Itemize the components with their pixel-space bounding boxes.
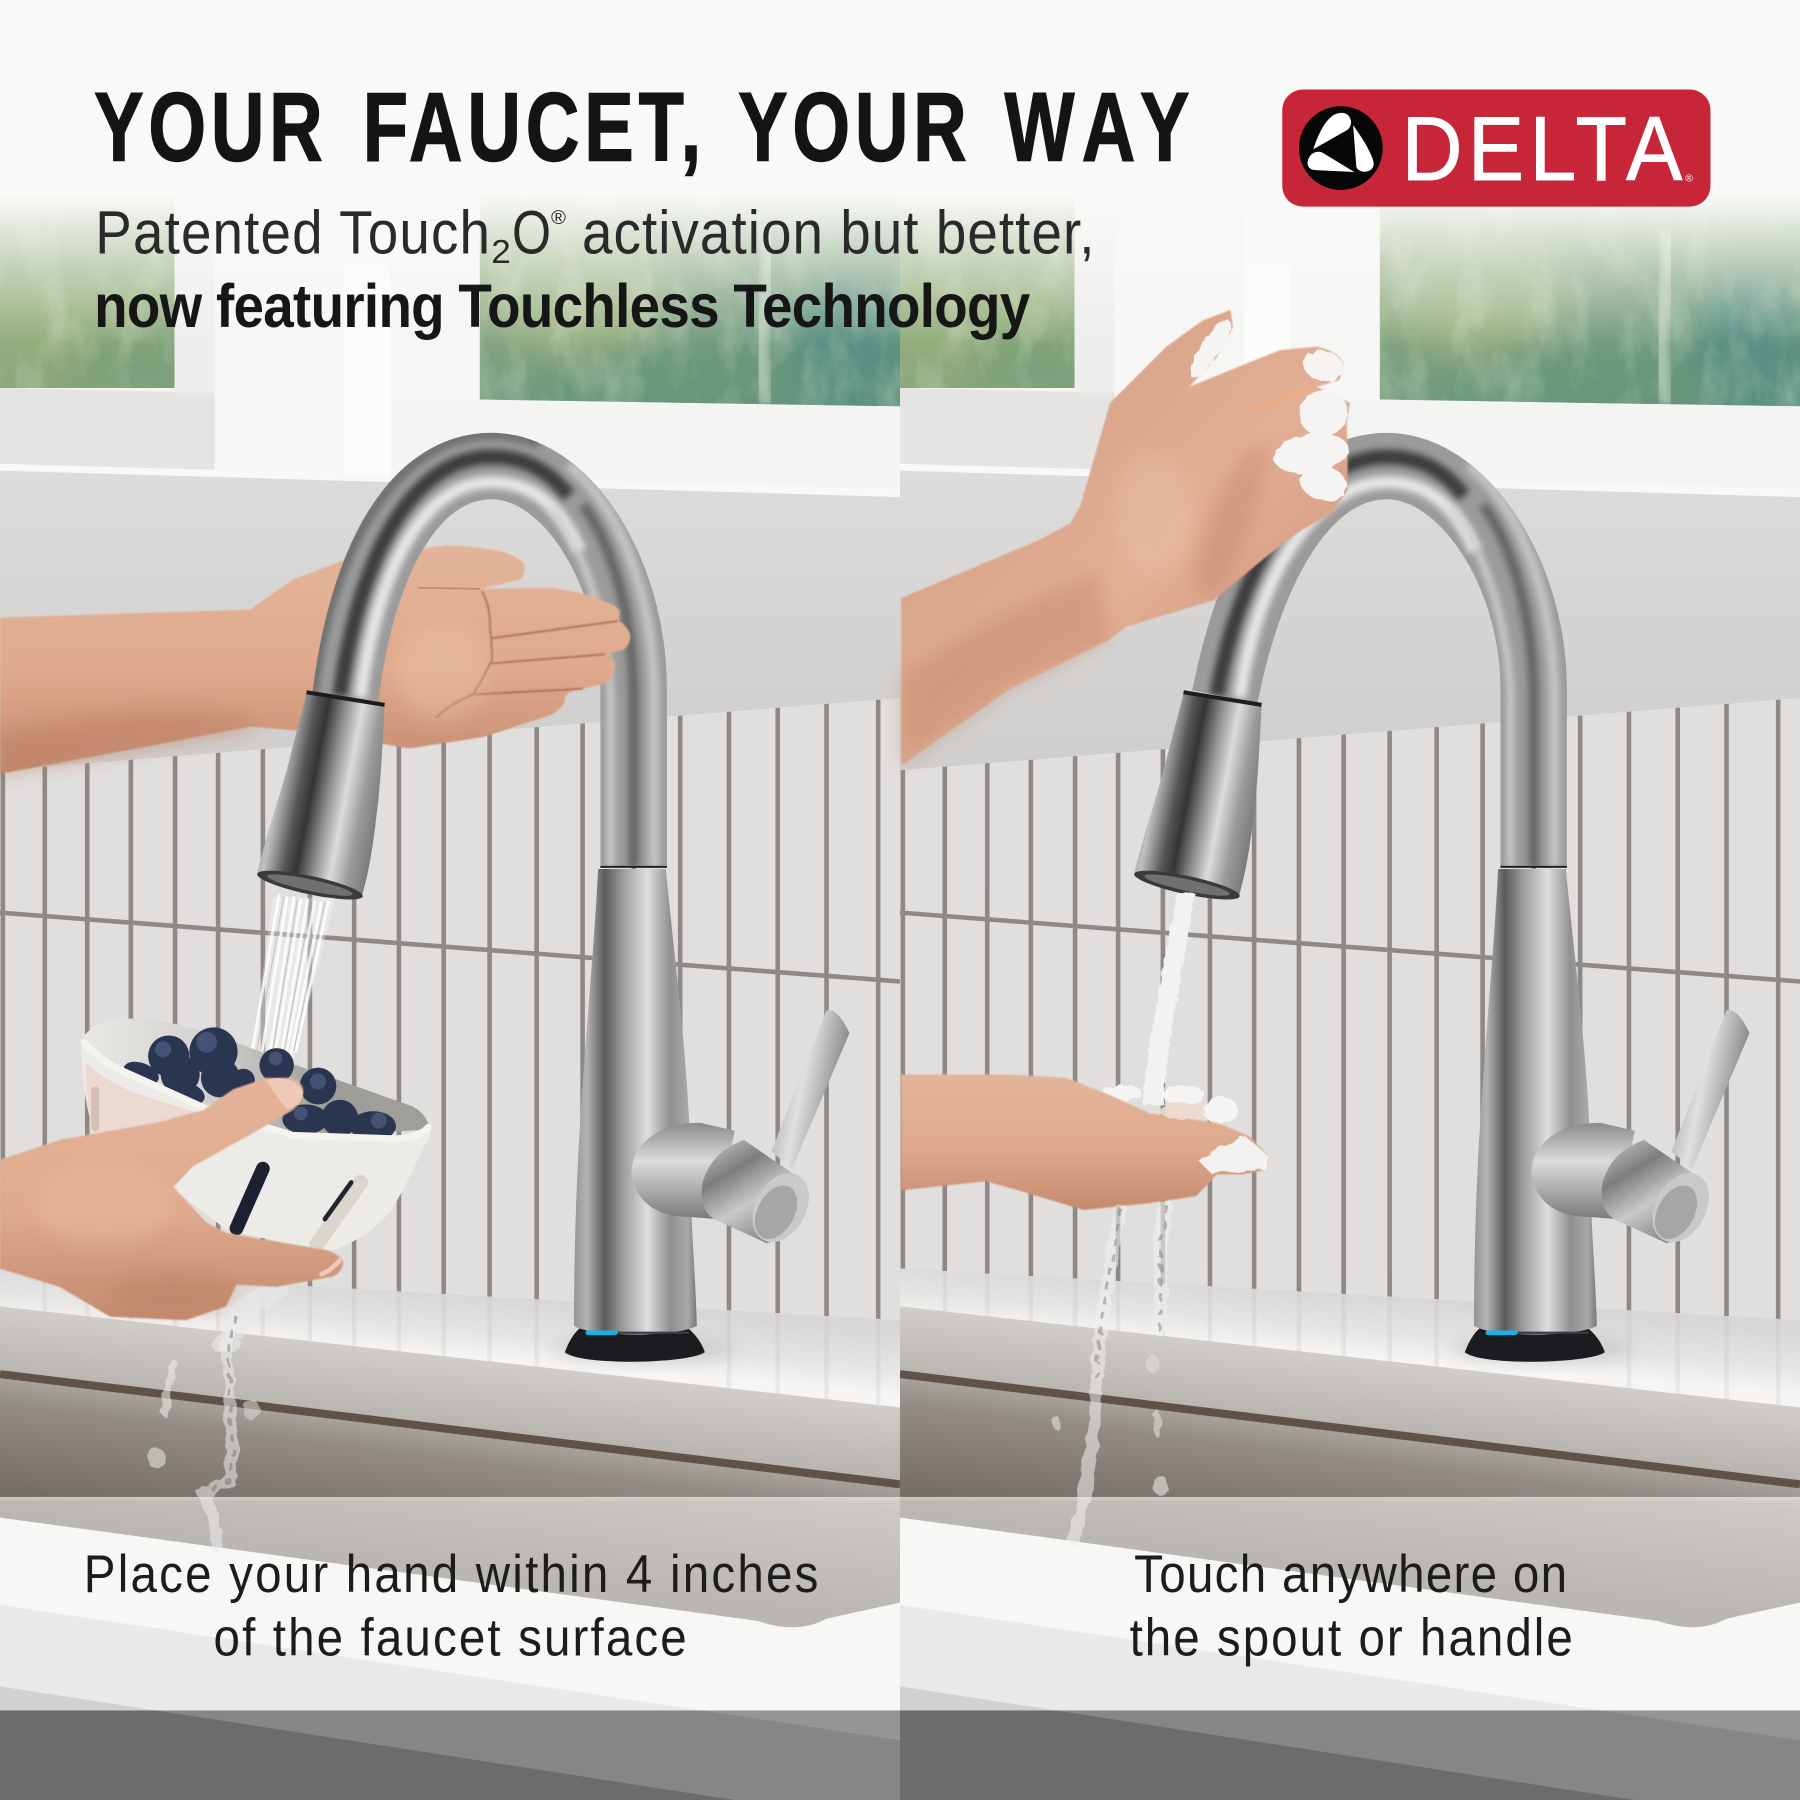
title: FAUCET, xyxy=(363,74,701,182)
foam behind lower hand xyxy=(1104,1085,1238,1124)
raised soapy hand touching spout xyxy=(901,310,1355,766)
title: WAY xyxy=(1004,74,1189,182)
faucet body and handle xyxy=(551,869,849,1362)
title xyxy=(94,74,1189,182)
left caption xyxy=(84,1545,818,1667)
water falling from bowl xyxy=(147,1317,259,1546)
bowl interior xyxy=(82,1019,429,1136)
spray water streams xyxy=(250,895,335,1068)
soap foam on fingertips xyxy=(1200,1136,1268,1173)
pull-down spray head xyxy=(255,692,385,905)
right kitchen background xyxy=(866,0,1800,1800)
pull-down spray head right xyxy=(1132,692,1262,905)
subtitle line one: Patented Touch xyxy=(95,200,490,267)
spout left limb in front of palm xyxy=(312,459,484,701)
right caption: the spout or handle xyxy=(1130,1608,1573,1667)
subtitle line one: O xyxy=(512,199,551,267)
subtitle line one: activation but better, xyxy=(582,200,1094,267)
water falling from hand xyxy=(1054,1207,1167,1541)
blueberries xyxy=(120,1027,396,1141)
registered mark: ® xyxy=(1685,173,1693,184)
panel: right touch scene xyxy=(893,204,1800,1800)
water splash under hand xyxy=(225,1288,276,1345)
logo wordmark: DELTA xyxy=(1402,98,1683,200)
lower soapy hand under water xyxy=(901,1074,1268,1210)
title: YOUR xyxy=(94,74,323,182)
subtitle line one: 2 xyxy=(491,234,511,271)
icon: delta triangle mark xyxy=(1299,106,1383,190)
left caption: of the faucet surface xyxy=(214,1608,687,1667)
title: YOUR xyxy=(738,74,967,182)
palm pool foam xyxy=(1159,1103,1205,1119)
gooseneck spout xyxy=(312,434,668,868)
left caption: Place your hand within 4 inches xyxy=(84,1545,818,1604)
right caption xyxy=(1130,1545,1573,1667)
bowl outer wall xyxy=(81,1040,430,1250)
right caption: Touch anywhere on xyxy=(1134,1545,1567,1604)
faucet body and handle right xyxy=(1451,869,1749,1362)
soap foam on fingertips xyxy=(1190,319,1355,506)
gooseneck spout right xyxy=(1217,457,1568,868)
raised arm and open hand xyxy=(0,545,630,776)
subtitle line two: now featuring Touchless Technology xyxy=(94,274,1030,341)
colander bowl with blueberries xyxy=(81,1019,430,1250)
subtitle line one xyxy=(95,199,1094,271)
lower hand holding bowl xyxy=(0,1078,343,1320)
left kitchen background xyxy=(0,0,907,1800)
panel: left touchless scene xyxy=(0,204,900,1800)
water stream right xyxy=(1142,893,1195,1104)
delta logo xyxy=(1282,90,1710,207)
subtitle line one: ® xyxy=(551,207,567,229)
